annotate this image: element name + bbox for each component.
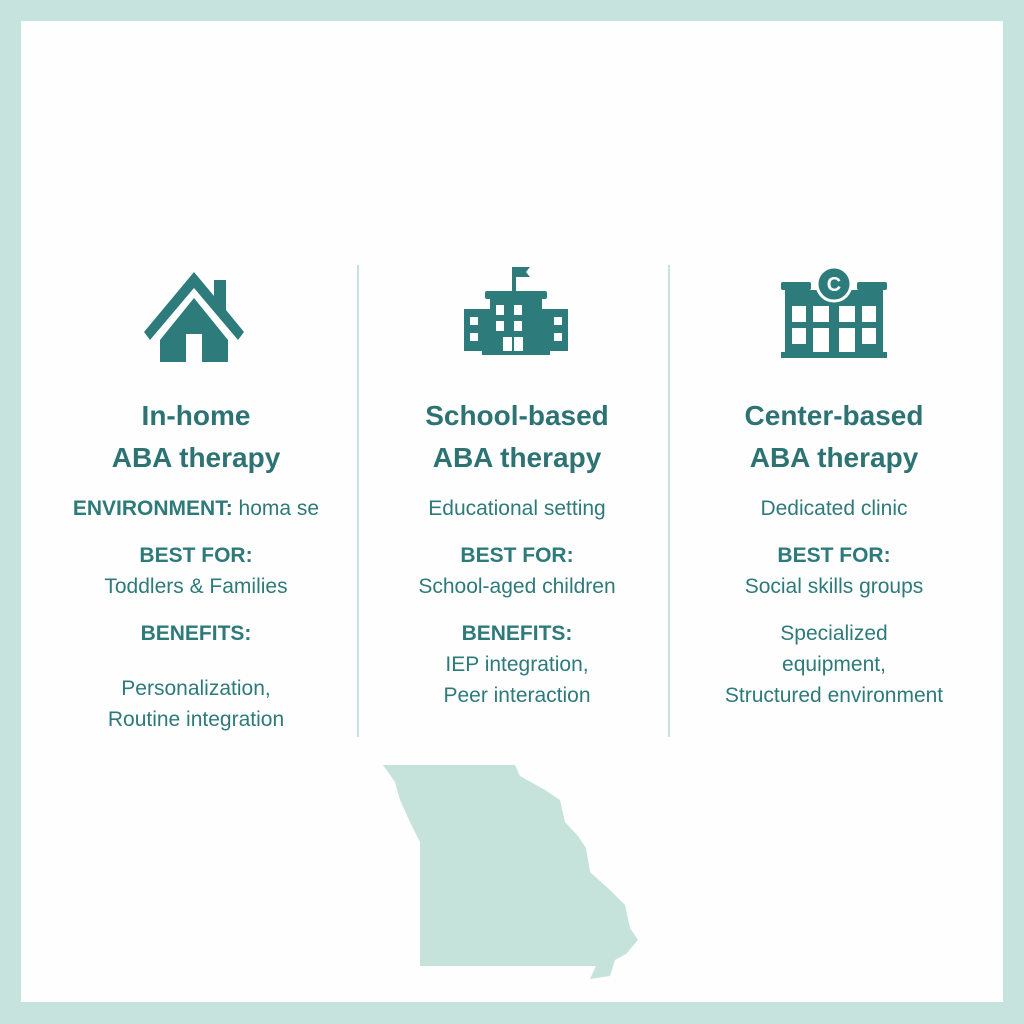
column: school: BEST FOR: (460, 544, 574, 567)
column: center: Specialized (780, 622, 888, 645)
column: in-home: BEST FOR: (139, 544, 253, 567)
column: school: ABA therapy (433, 442, 601, 473)
icon: house (144, 272, 244, 362)
column: school: Peer interaction (443, 684, 591, 707)
column: school: Educational setting (428, 497, 606, 520)
column: center: ABA therapy (750, 442, 918, 473)
icon: school (464, 267, 568, 355)
column: center: Dedicated clinic (760, 497, 908, 520)
column: in-home: Personalization, (121, 677, 271, 700)
column: center: Social skills groups (745, 575, 923, 598)
column: in-home: Routine integration (108, 708, 284, 731)
column: school: School-based (425, 400, 609, 431)
column: center: Center-based (745, 400, 923, 431)
column: school: BENEFITS: (462, 622, 572, 645)
column: school: IEP integration, (445, 653, 589, 676)
icon: center (781, 268, 887, 358)
column: center (725, 400, 943, 707)
column: school: School-aged children (418, 575, 616, 598)
column: center: equipment, (782, 653, 886, 676)
icon: center: C (827, 274, 841, 296)
column: in-home: BENEFITS: (141, 622, 251, 645)
column: in-home: ENVIRONMENT: homa se (73, 497, 319, 520)
column: in-home: Toddlers & Families (104, 575, 288, 598)
column: center: BEST FOR: (777, 544, 891, 567)
column: in-home (73, 400, 319, 731)
column: center: Structured environment (725, 684, 943, 707)
column: school (418, 400, 616, 707)
column: in-home: In-home (142, 400, 250, 431)
column: in-home: ABA therapy (112, 442, 280, 473)
